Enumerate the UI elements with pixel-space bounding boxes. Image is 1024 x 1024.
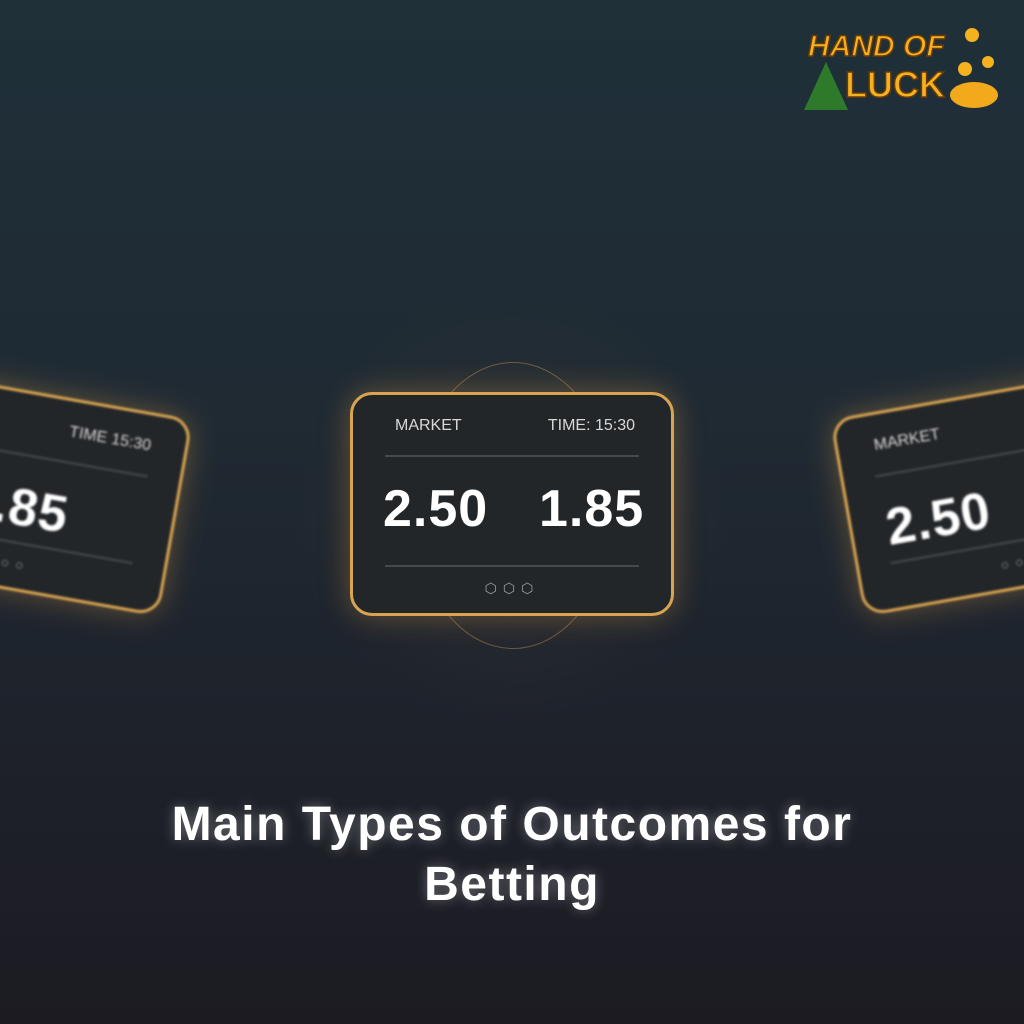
center card: TIME: 15:30 (548, 417, 635, 434)
background glow (292, 288, 732, 728)
left card: ○○ (0, 554, 31, 574)
left card: TIME 15:30 (68, 423, 152, 455)
title: Betting (424, 858, 600, 911)
right card (830, 367, 1024, 617)
logo: HAND OF (808, 30, 945, 63)
right card: 2.50 (882, 482, 995, 557)
center card: MARKET (395, 417, 462, 434)
title: Main Types of Outcomes for (172, 798, 852, 851)
right card: MARKET (873, 426, 941, 454)
logo (804, 28, 998, 110)
left card (0, 367, 193, 617)
center card: ⬡⬡⬡ (485, 580, 539, 596)
title (168, 798, 853, 916)
center card (350, 392, 674, 616)
logo: LUCK (845, 64, 945, 105)
center card: 1.85 (539, 480, 644, 538)
center card: 2.50 (383, 480, 488, 538)
ring behind center card (412, 362, 614, 649)
